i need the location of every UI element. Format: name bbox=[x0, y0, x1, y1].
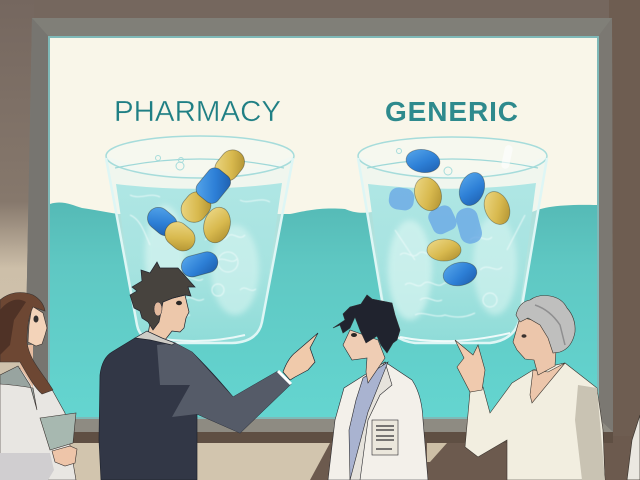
shirt bbox=[349, 362, 388, 480]
eye bbox=[522, 334, 526, 338]
pills: pharmacy glass bbox=[142, 144, 250, 279]
held glass bbox=[40, 413, 76, 450]
face bbox=[28, 306, 47, 346]
capsule: blue gold bbox=[142, 202, 200, 256]
glass: generic bbox=[358, 137, 547, 343]
eye bbox=[351, 333, 357, 337]
faded pills bbox=[388, 186, 484, 246]
neck bbox=[20, 345, 33, 388]
pills: generic glass bbox=[388, 147, 514, 289]
pill: gold oval bbox=[200, 204, 234, 246]
heading: PHARMACY: PHARMACY bbox=[114, 96, 281, 128]
figure: woman in lab coat bbox=[0, 293, 77, 480]
lab coat bbox=[0, 368, 76, 480]
sweater bbox=[465, 363, 605, 480]
gold pill bbox=[410, 174, 446, 214]
glass: pharmacy bbox=[106, 136, 294, 343]
collar bbox=[135, 331, 175, 345]
silver hair bbox=[516, 296, 575, 353]
blue pill top bbox=[405, 147, 441, 175]
figure: edge of person at right bbox=[627, 415, 640, 480]
hand pointing bbox=[283, 333, 318, 380]
blue pill low bbox=[441, 259, 479, 289]
hand bbox=[52, 446, 77, 466]
eye bbox=[176, 301, 182, 305]
hair bbox=[333, 295, 400, 353]
figure: man in dark suit bbox=[99, 262, 318, 480]
eye bbox=[34, 316, 38, 322]
heading: GENERIC: GENERIC bbox=[385, 96, 518, 127]
hair bbox=[0, 293, 53, 394]
gold pill low bbox=[427, 239, 461, 261]
neck and face bbox=[343, 330, 385, 383]
pill: blue oval bbox=[179, 249, 220, 279]
gold pill right bbox=[480, 188, 514, 228]
hand bbox=[455, 340, 485, 392]
coat bbox=[328, 362, 428, 480]
figure: doctor in white coat bbox=[328, 295, 428, 480]
teal water band bbox=[50, 203, 597, 417]
badge bbox=[372, 420, 398, 455]
face and neck bbox=[513, 317, 556, 375]
ear bbox=[154, 302, 162, 316]
poster panel bbox=[50, 38, 597, 417]
suit bbox=[99, 338, 291, 480]
capsule: gold blue gold bbox=[176, 144, 250, 228]
figure: older man in cream sweater bbox=[455, 296, 605, 480]
blue pill right bbox=[455, 169, 489, 209]
hair bbox=[130, 262, 195, 330]
neck and face bbox=[148, 295, 189, 340]
